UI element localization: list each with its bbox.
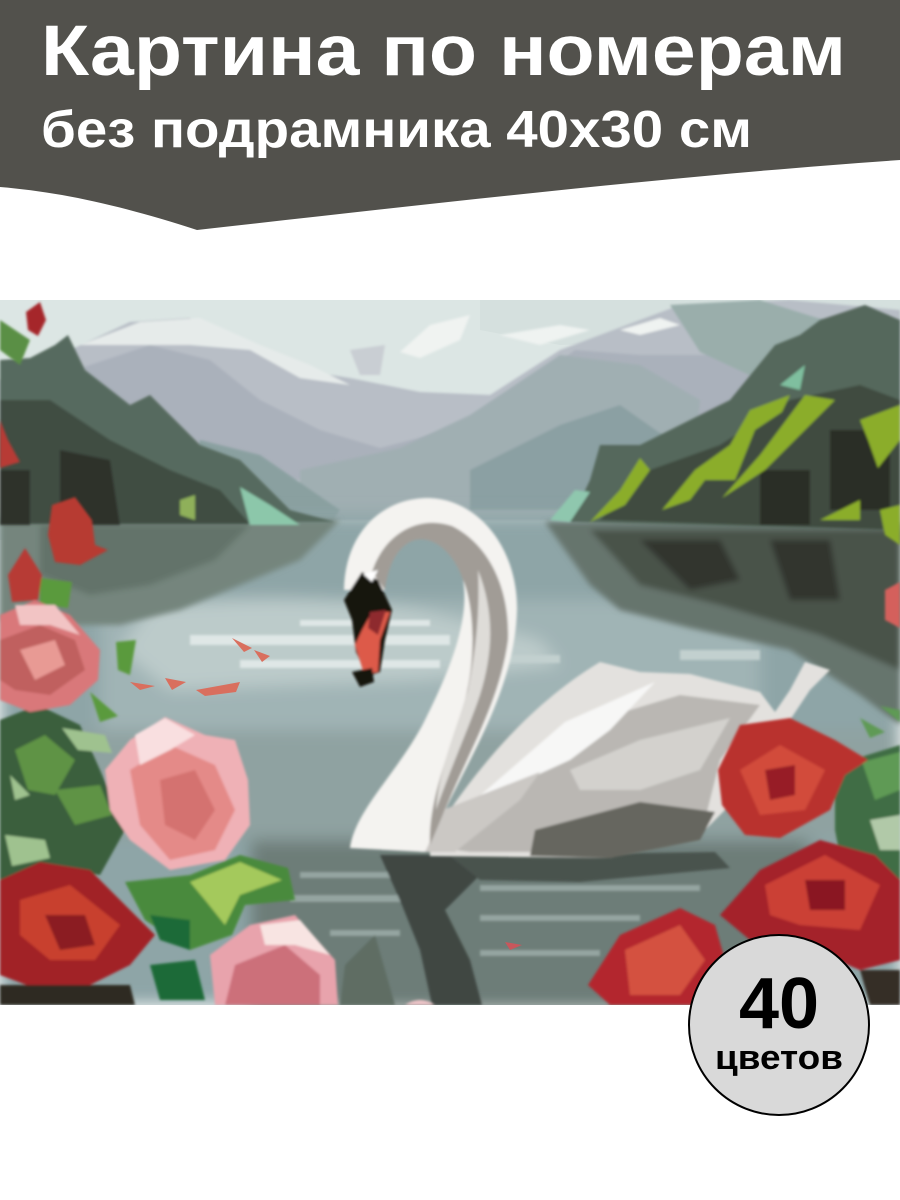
floating petals xyxy=(130,638,522,950)
swan xyxy=(344,498,830,858)
right forest xyxy=(550,305,900,545)
large pink rose xyxy=(105,717,250,870)
bud, right edge xyxy=(885,582,900,628)
badge circle xyxy=(689,935,869,1115)
swan body xyxy=(430,662,830,858)
red bud xyxy=(48,497,108,565)
sky xyxy=(0,300,900,540)
swan head and beak xyxy=(344,572,392,676)
dark red bud top left xyxy=(26,302,46,336)
red bud small xyxy=(8,548,42,602)
swan neck xyxy=(344,498,517,852)
subtitle: без подрамника 40х30 см xyxy=(41,101,752,159)
left forest xyxy=(0,335,335,525)
roses and leaves, right xyxy=(405,582,900,1005)
title banner xyxy=(0,0,900,230)
distant mountains xyxy=(0,300,900,520)
dark red rose, bottom left xyxy=(0,862,155,990)
red rose, bottom center xyxy=(588,908,725,1005)
red rose, lower right xyxy=(720,840,900,970)
badge label: цветов xyxy=(715,1039,843,1077)
pink rose, bottom xyxy=(210,915,338,1005)
title: Картина по номерам xyxy=(41,12,846,91)
leaves xyxy=(834,744,900,880)
pink rose, left xyxy=(0,600,100,712)
lake water xyxy=(0,515,900,1010)
green valley slopes xyxy=(180,355,700,525)
banner shape xyxy=(0,0,900,230)
panel: painting of a swan on a mountain lake xyxy=(0,300,900,1010)
badge: 40 colours xyxy=(689,935,869,1115)
leaves xyxy=(0,320,295,1000)
badge number: 40 xyxy=(739,964,819,1044)
roses and leaves, left xyxy=(0,302,338,1005)
red rose by swan tail xyxy=(718,718,868,838)
